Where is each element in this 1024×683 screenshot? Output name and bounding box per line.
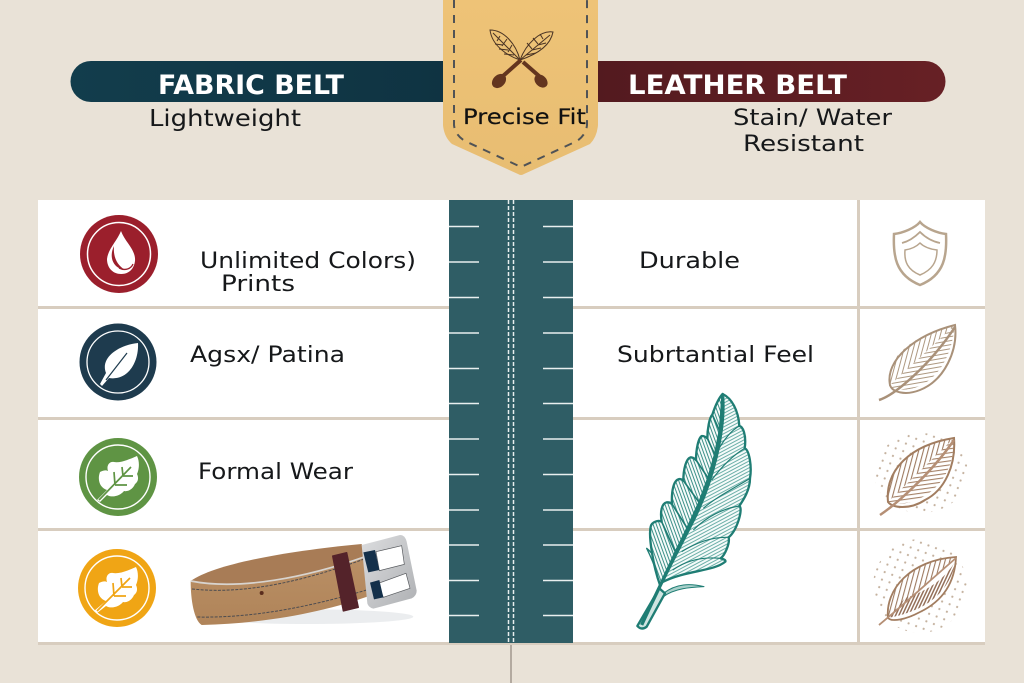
text: lightweight: Lightweight: [149, 106, 301, 132]
text: durable: Durable: [639, 248, 740, 274]
icon: shield: [894, 222, 946, 285]
text: stain and water resistant: Resistant: [743, 131, 864, 157]
header bar: leather belt: LEATHER BELT: [628, 70, 848, 101]
text: substantial feel: Subrtantial Feel: [617, 343, 814, 368]
text: unlimited colors prints: Prints: [221, 271, 295, 297]
text: stain and water resistant: [733, 105, 893, 157]
text: formal wear: Formal Wear: [198, 460, 354, 485]
centre teal strap with ruler ticks: [449, 200, 573, 643]
icon: orange leaf: [78, 549, 156, 627]
icon: navy leaf: [80, 324, 156, 400]
illustration: teal feather: [637, 394, 751, 629]
icon: leaf line drawing one: [879, 325, 955, 400]
text: stain and water resistant: Stain/ Water: [733, 105, 893, 131]
panel: comparison table: [38, 200, 985, 645]
icon: green leaf: [79, 438, 157, 516]
text: agsx patina: Agsx/ Patina: [190, 343, 345, 368]
icon: red water drop: [80, 215, 158, 293]
badge: precise fit: Precise Fit: [463, 105, 586, 129]
icon: leaf with dots one: [874, 433, 968, 515]
header bar: fabric belt: [70, 61, 446, 102]
badge: precise fit: [443, 0, 598, 175]
icon: crossed feathers: [489, 30, 553, 91]
text: unlimited colors prints: Unlimited Colors): [200, 248, 416, 274]
bottom centre line: [510, 643, 512, 683]
icon: leaf with dots two: [873, 539, 967, 633]
text: unlimited colors prints: [200, 248, 416, 297]
header bar: leather belt: [597, 61, 945, 102]
header bar: fabric belt: FABRIC BELT: [158, 70, 345, 101]
belt illustration: [191, 535, 417, 625]
